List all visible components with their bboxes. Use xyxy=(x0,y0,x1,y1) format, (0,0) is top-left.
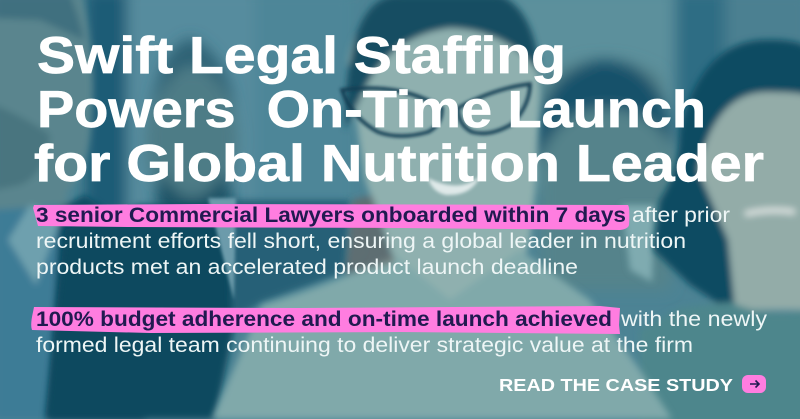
text block: first result xyxy=(33,204,730,279)
title: Swift Legal Staffing xyxy=(37,27,566,85)
central woman's glasses xyxy=(342,84,530,136)
left man xyxy=(0,0,150,419)
icon: arrow button xyxy=(742,375,766,393)
title xyxy=(34,27,764,193)
text block: first result: after prior xyxy=(632,204,730,227)
text block: second result: 100% budget adherence and on-time launch achieved xyxy=(36,308,612,331)
text block: first result: products met an accelerated product launch deadline xyxy=(36,256,578,279)
text block: first result: 3 senior Commercial Lawyers onboarded within 7 days xyxy=(36,204,626,227)
highlight: first result xyxy=(33,204,629,230)
text block: second result: formed legal team continuing to deliver strategic value at the firm xyxy=(36,334,693,357)
text block: first result: recruitment efforts fell short, ensuring a global leader in nutrition xyxy=(36,230,686,253)
highlight: second result xyxy=(31,306,620,334)
call to action: READ THE CASE STUDY xyxy=(499,375,733,395)
central woman's smile xyxy=(428,176,480,195)
suit right of middle man xyxy=(228,200,350,320)
right man's shirt xyxy=(622,205,655,282)
right man xyxy=(535,59,680,290)
title: for Global Nutrition Leader xyxy=(34,135,764,193)
middle man xyxy=(146,38,238,222)
central woman xyxy=(212,0,672,419)
title: Powers On-Time Launch xyxy=(37,81,706,139)
shirt collar of middle man xyxy=(208,198,236,300)
right woman xyxy=(640,40,800,419)
text block: second result xyxy=(31,306,768,357)
suit of middle man xyxy=(45,205,240,419)
text block: second result: with the newly xyxy=(620,308,768,331)
